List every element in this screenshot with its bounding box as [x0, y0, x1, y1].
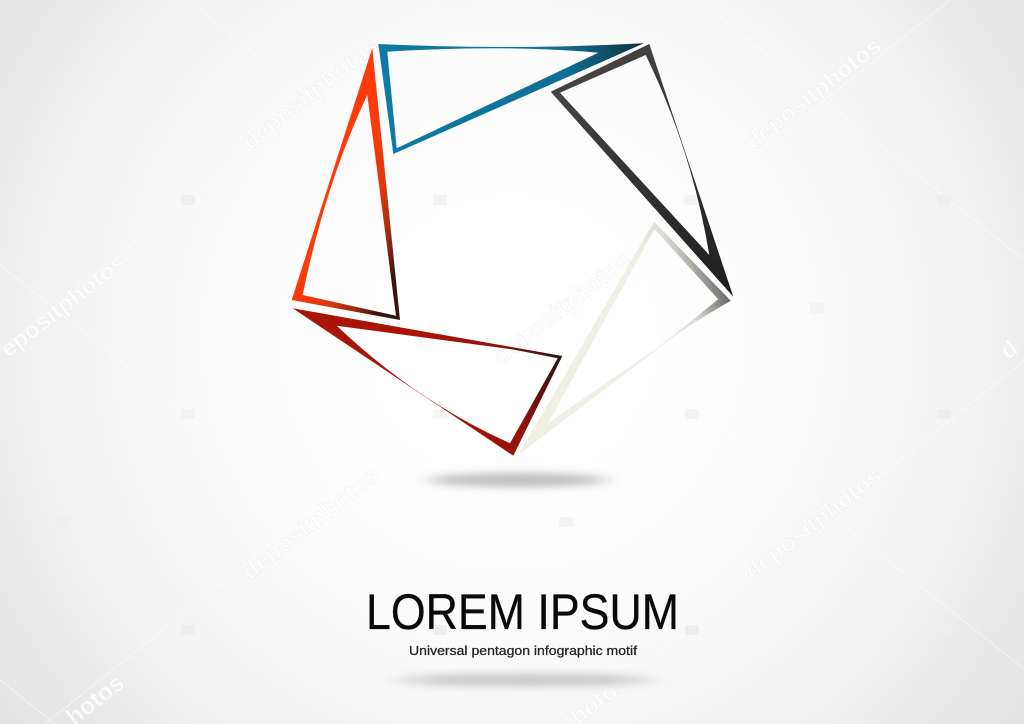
triangle: dark red [293, 308, 562, 456]
text shadow [400, 674, 650, 686]
watermark pattern: depositphotos [489, 247, 636, 370]
watermark pattern: depositphotos [740, 33, 887, 156]
triangle: dark grey [551, 44, 733, 297]
triangle: light grey [518, 222, 731, 455]
watermark pattern: depositphotos [237, 33, 384, 156]
logo shadow [428, 473, 608, 487]
watermark pattern: depositphotos [740, 463, 887, 586]
watermark pattern: depositphotos [237, 463, 384, 586]
subtitle: Universal pentagon infographic motif [409, 644, 638, 658]
watermark pattern: d [995, 335, 1023, 365]
triangle: blue [378, 43, 644, 154]
title: LOREM IPSUM [366, 584, 679, 640]
triangle: orange [292, 48, 400, 320]
pentagon logo [292, 43, 733, 456]
